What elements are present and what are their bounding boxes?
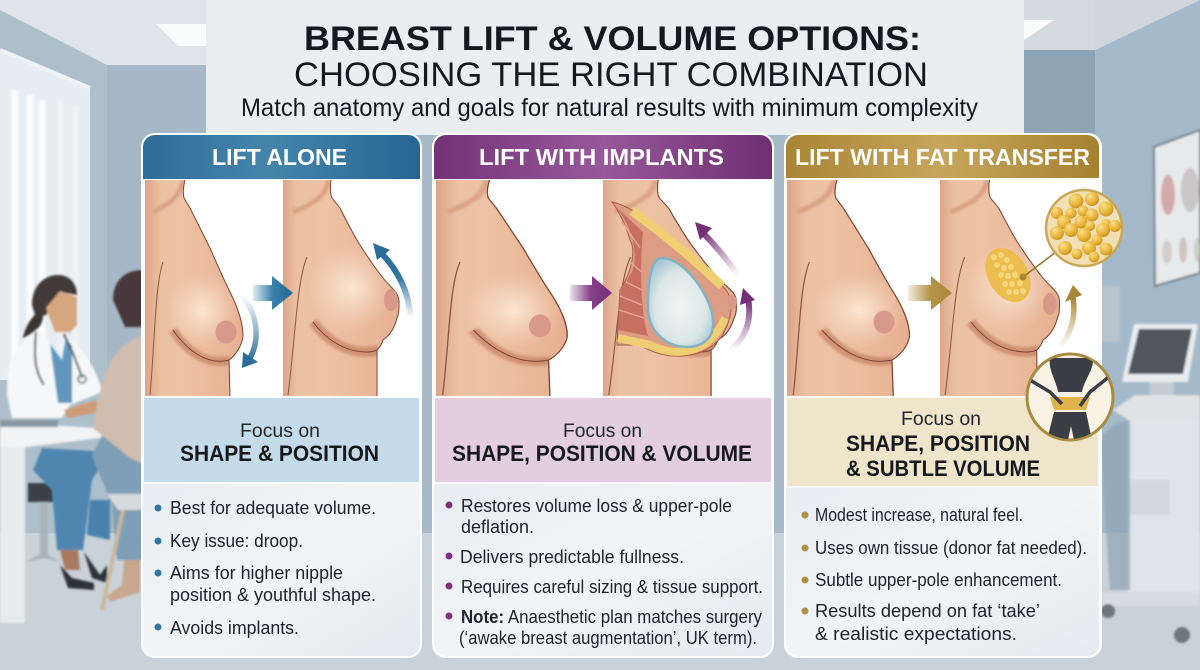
focus band: Focus on (240, 421, 320, 442)
title: CHOOSING THE RIGHT COMBINATION (294, 56, 928, 94)
focus band (787, 398, 1098, 486)
bullet list: Note: Anaesthetic plan matches surgery (461, 606, 763, 627)
arrow: before to after (253, 276, 293, 310)
focus band: SHAPE & POSITION (180, 441, 379, 466)
icon: donor site (1027, 354, 1113, 440)
focus band (435, 398, 771, 482)
bullet list: Results depend on fat ‘take’ (815, 600, 1040, 621)
arrow: upward lift, upper (695, 222, 738, 275)
bullet list: Best for adequate volume. (170, 497, 376, 518)
fat injection patch (976, 240, 1040, 310)
before and after illustration (144, 180, 419, 397)
panel header: LIFT WITH FAT TRANSFER (795, 144, 1090, 170)
title panel (206, 0, 1024, 135)
panel header (143, 135, 420, 179)
bullet list: Modest increase, natural feel. (815, 504, 1023, 525)
bullet list: & realistic expectations. (815, 623, 1017, 644)
window blinds (0, 50, 90, 380)
icon: fat cells magnified (1046, 190, 1122, 266)
focus band: SHAPE, POSITION & VOLUME (452, 441, 752, 466)
bullet list: Delivers predictable fullness. (460, 546, 684, 567)
title (294, 20, 928, 94)
bullet list: Avoids implants. (170, 617, 299, 638)
implant cross-section (612, 202, 737, 356)
bullet list: Restores volume loss & upper-pole (461, 495, 732, 516)
focus band: Focus on (563, 421, 642, 442)
panel: lift with fat transfer (785, 134, 1122, 657)
bullet list: Uses own tissue (donor fat needed). (815, 537, 1087, 558)
arrow: before to after (908, 276, 952, 310)
callout line (1020, 252, 1056, 280)
focus band: Focus on (901, 409, 981, 430)
before and after illustration (435, 180, 771, 397)
title: BREAST LIFT & VOLUME OPTIONS: (304, 20, 921, 58)
bullet list: Aims for higher nipple (170, 562, 343, 583)
before and after illustration (787, 180, 1098, 397)
bullet list: Key issue: droop. (170, 530, 303, 551)
arrow: before to after (570, 276, 612, 310)
bullet list: position & youthful shape. (170, 584, 376, 605)
focus band: SHAPE, POSITION (846, 431, 1030, 456)
desk (0, 420, 130, 623)
bullet list: (‘awake breast augmentation’, UK term). (459, 627, 757, 648)
bullet list (786, 488, 1099, 656)
focus band (144, 398, 419, 482)
arrow: lift upward (373, 243, 410, 318)
bullet list: Subtle upper-pole enhancement. (815, 569, 1062, 590)
panel header (786, 135, 1099, 178)
patient (92, 270, 143, 610)
doctor (7, 275, 102, 418)
subtitle: Match anatomy and goals for natural results with minimum complexity (241, 94, 978, 122)
doctor legs and stool (26, 448, 110, 590)
arrow: upward lift, lower (730, 288, 755, 350)
bullet list (143, 484, 420, 656)
arrow: droop downward (242, 295, 258, 368)
consultation scene: doctor and patient (0, 270, 143, 623)
panel: lift with implants (433, 134, 773, 657)
bullet list: Requires careful sizing & tissue support. (461, 576, 763, 597)
ultrasound machine (1100, 286, 1200, 643)
panel header (434, 135, 772, 179)
panel header: LIFT ALONE (212, 144, 347, 170)
panel header: LIFT WITH IMPLANTS (479, 144, 724, 170)
bullet list (434, 484, 772, 656)
wall poster (1154, 130, 1200, 286)
panel: lift alone (142, 134, 421, 657)
focus band: & SUBTLE VOLUME (846, 456, 1040, 481)
arrow: upward lift (1060, 285, 1082, 347)
bullet list: deflation. (461, 516, 534, 537)
